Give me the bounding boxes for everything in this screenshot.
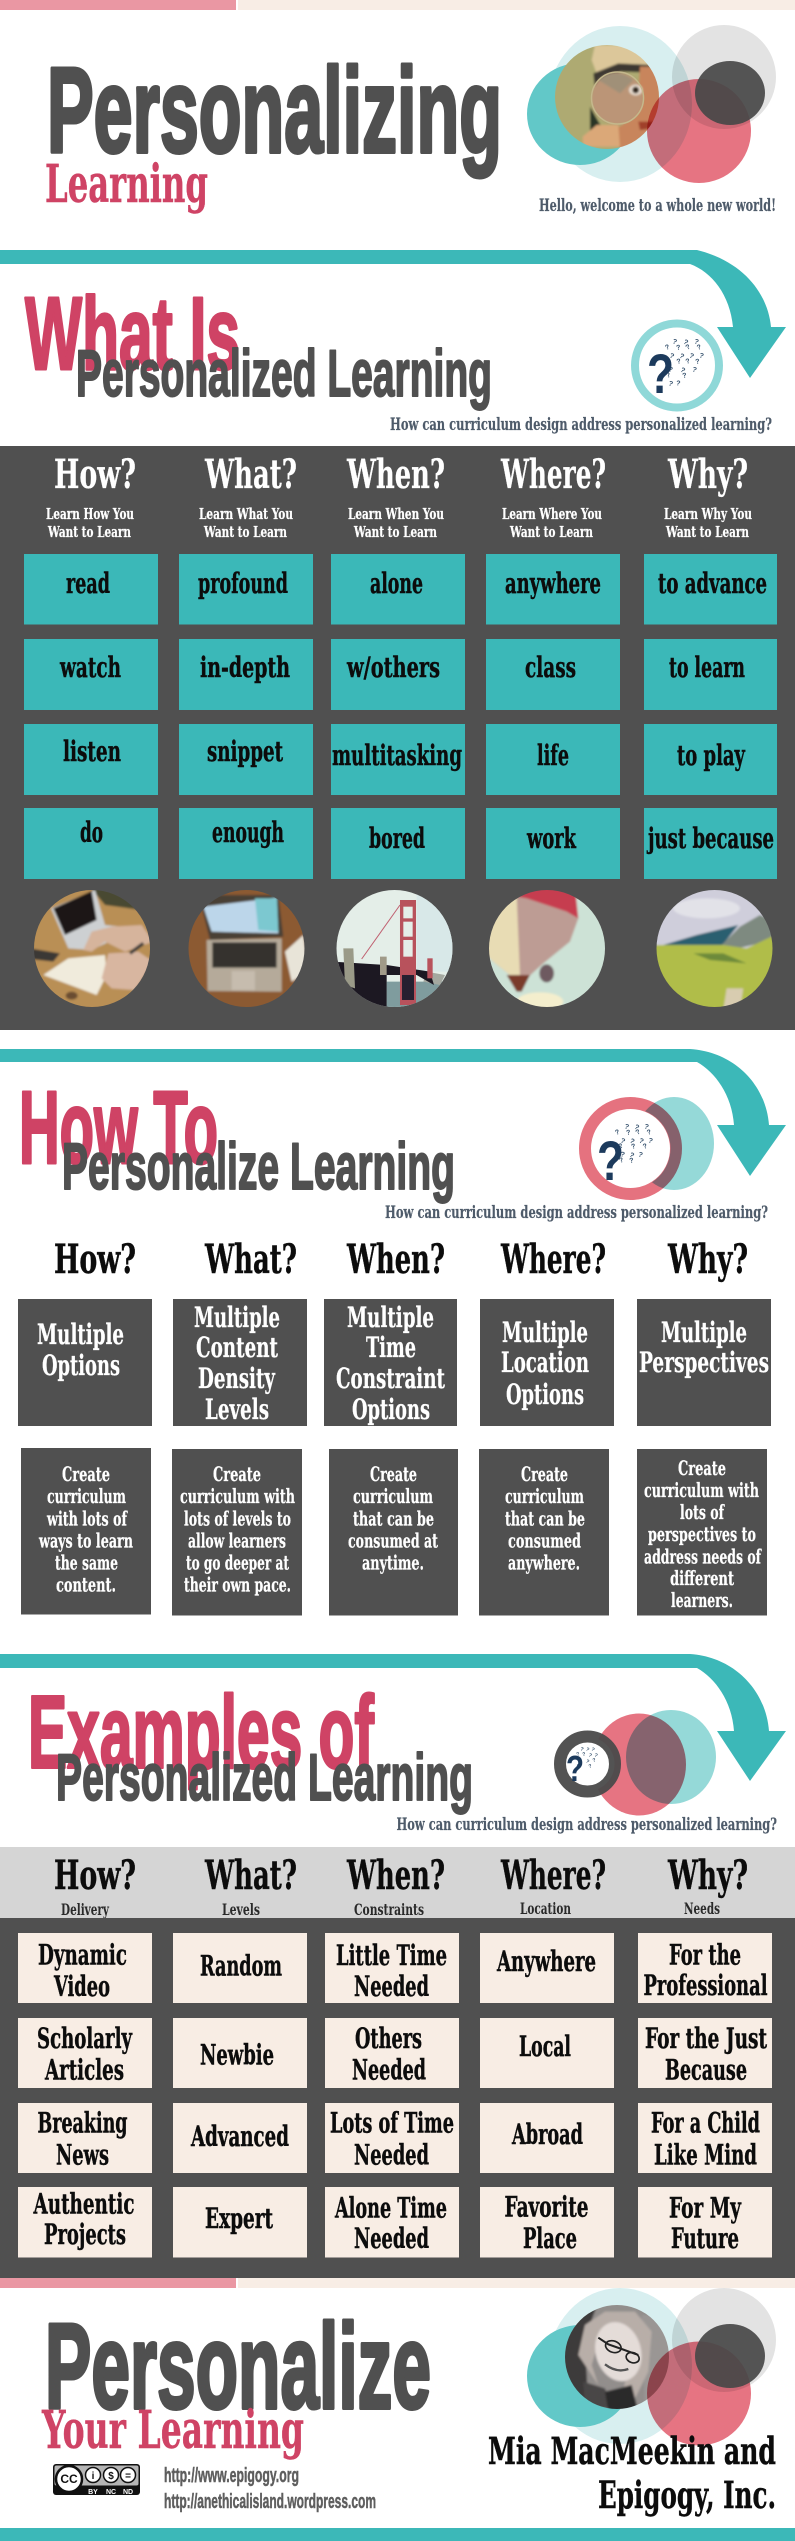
option labels: profound <box>198 567 288 600</box>
column subheadings: Learn What You <box>199 505 293 523</box>
column headings: how to: When? <box>346 1236 445 1283</box>
heading: Personalize Learning: Personalize Learning <box>62 1129 455 1203</box>
strategy labels: Options <box>352 1393 430 1426</box>
bottom teal bar <box>0 2528 795 2541</box>
licence badge: ND <box>123 2489 133 2496</box>
icon: question mark circle: ? ? ? ? <box>666 358 700 367</box>
column headings: Why? <box>667 451 748 498</box>
example labels: Needed <box>354 2222 429 2255</box>
licence badge: i <box>92 2471 95 2482</box>
footer title: Personalize <box>45 2298 431 2434</box>
example labels: Abroad <box>511 2118 583 2151</box>
teal option boxes <box>24 554 777 879</box>
description text: ways to learn <box>38 1528 133 1552</box>
description text: Create <box>678 1456 726 1480</box>
example labels: Needed <box>354 2138 429 2172</box>
description text: Create <box>213 1462 261 1486</box>
icon: question mark circle: ? ? ? ? <box>664 344 702 353</box>
example labels: Authentic <box>33 2188 134 2220</box>
option labels: multitasking <box>332 739 462 772</box>
cream boxes <box>18 1933 772 2258</box>
band headings <box>54 1852 748 1899</box>
description text: different <box>670 1566 734 1590</box>
column subheadings: Want to Learn <box>509 523 593 541</box>
example labels: Alone Time <box>334 2192 447 2224</box>
icon: question mark circle: ? ? ? <box>667 366 697 375</box>
links: http://anethicalisland.wordpress.com <box>164 2491 376 2513</box>
option labels: anywhere <box>505 567 601 600</box>
example labels: Advanced <box>190 2120 289 2153</box>
band labels <box>61 1899 720 1919</box>
option labels: in-depth <box>200 651 290 684</box>
example labels: Place <box>523 2222 577 2255</box>
icon: question mark with overlapping circles: ? ? ? ? <box>576 1751 598 1759</box>
option labels <box>59 567 774 855</box>
description text: curriculum <box>47 1484 126 1508</box>
description text: with lots of <box>46 1506 128 1530</box>
icon: question mark with overlapping circles: ? ? <box>576 1763 592 1770</box>
description text: curriculum with <box>180 1484 295 1508</box>
description text: Create <box>62 1462 110 1486</box>
arrow: section 3 <box>0 1654 786 1781</box>
description text: allow learners <box>188 1528 286 1552</box>
band labels: Needs <box>684 1899 720 1918</box>
strategy labels: Constraint <box>336 1362 445 1395</box>
option labels: life <box>537 739 569 772</box>
licence badge: BY <box>88 2489 98 2496</box>
strategy labels: Multiple <box>37 1318 124 1351</box>
example labels: Articles <box>44 2054 124 2086</box>
example labels: Needed <box>352 2054 426 2086</box>
photo: hot air balloon <box>489 890 605 1007</box>
heading: Examples of: Examples of <box>28 1674 374 1790</box>
author credit <box>488 2429 776 2517</box>
band headings: When? <box>346 1852 445 1899</box>
panel: examples header band <box>0 1847 795 1919</box>
column subheadings: Want to Learn <box>665 523 749 541</box>
photo: green mountain landscape <box>656 890 772 1007</box>
panel: what is personalized learning <box>0 446 795 1030</box>
dark strategy boxes <box>18 1299 771 1426</box>
column subheadings: Learn Where You <box>502 505 602 523</box>
example labels: Dynamic <box>38 1938 127 1972</box>
licence badge: = <box>125 2471 131 2482</box>
band labels: Delivery <box>61 1900 109 1919</box>
footer subtitle: Your Learning <box>41 2400 304 2461</box>
top colour bars <box>0 0 795 10</box>
icon: question mark with pink ring: ? ? ? ? <box>619 1137 653 1146</box>
example labels: Breaking <box>38 2106 128 2140</box>
icon: question mark with pink ring <box>585 1097 714 1194</box>
icon: question mark with overlapping circles <box>560 1710 716 1816</box>
description text: consumed <box>508 1528 581 1552</box>
column headings: What? <box>204 451 297 498</box>
band headings: Where? <box>500 1852 606 1899</box>
strategy labels <box>37 1301 769 1426</box>
example labels: Projects <box>44 2218 126 2251</box>
strategy labels: Time <box>366 1331 416 1364</box>
description text: that can be <box>353 1506 434 1530</box>
photo: hands writing at laptop <box>34 890 150 1007</box>
description text: content. <box>56 1572 116 1596</box>
column subheadings: Learn When You <box>348 505 444 523</box>
band labels: Levels <box>222 1900 260 1919</box>
description text: Create <box>370 1462 417 1486</box>
column subheadings: Want to Learn <box>353 523 437 541</box>
example labels: Future <box>671 2222 739 2255</box>
option labels: work <box>526 822 576 855</box>
icon: question mark with overlapping circles: ? ? ? <box>577 1757 596 1765</box>
description text: lots of <box>680 1500 725 1524</box>
subtitle: Learning: Learning <box>45 154 208 215</box>
option labels: w/others <box>346 651 440 684</box>
option labels: do <box>80 816 103 849</box>
strategy labels: Multiple <box>347 1301 434 1334</box>
icon: question mark with pink ring: ? ? ? ? <box>614 1129 652 1138</box>
option labels: listen <box>63 735 121 768</box>
column headings <box>54 451 748 498</box>
description text: curriculum <box>505 1484 584 1508</box>
description text: lots of levels to <box>184 1506 291 1530</box>
description text: Create <box>521 1462 568 1486</box>
icon: question mark with overlapping circles: ? ? ? <box>579 1746 596 1753</box>
description text: curriculum <box>353 1484 433 1508</box>
column headings: how to <box>54 1236 748 1283</box>
example labels: Favorite <box>504 2190 588 2224</box>
heading: Personalized Learning: Personalized Learning <box>56 1740 473 1814</box>
example labels: Random <box>200 1950 282 1982</box>
icon: question mark with overlapping circles: ? <box>566 1748 584 1789</box>
option labels: read <box>66 567 110 600</box>
icon: question mark with pink ring: ? ? <box>618 1157 634 1166</box>
strategy labels: Content <box>196 1331 278 1364</box>
description text: to go deeper at <box>186 1550 289 1574</box>
description text: that can be <box>505 1506 585 1530</box>
example labels: Little Time <box>336 1939 447 1972</box>
strategy labels: Location <box>501 1346 589 1379</box>
option labels: enough <box>212 816 284 849</box>
band headings: What? <box>204 1852 297 1899</box>
column subheadings: Want to Learn <box>203 523 287 541</box>
icon: question mark circle <box>635 324 719 408</box>
photo: golden gate bridge <box>336 890 452 1007</box>
example labels: For My <box>669 2192 741 2224</box>
footer circles with author photo <box>527 2288 776 2446</box>
column headings: how to: Why? <box>667 1236 748 1283</box>
example labels <box>33 1938 767 2255</box>
strategy labels: Levels <box>205 1393 269 1426</box>
example labels: Needed <box>354 1970 429 2003</box>
strategy labels: Multiple <box>194 1301 280 1334</box>
column headings: Where? <box>500 451 606 498</box>
example labels: Anywhere <box>496 1945 596 1978</box>
icon: question mark circle: ? ? <box>665 372 687 381</box>
icon: question mark with pink ring: ? ? ? <box>619 1151 643 1160</box>
footer colour bars <box>0 2278 795 2288</box>
option labels: class <box>525 651 576 684</box>
option labels: bored <box>369 822 425 855</box>
example labels: Because <box>665 2054 747 2086</box>
description text: anywhere. <box>508 1550 580 1574</box>
licence badge <box>53 2464 140 2496</box>
arrow: section 1 <box>0 250 786 378</box>
band headings: Why? <box>667 1852 748 1899</box>
option labels: to learn <box>669 651 745 684</box>
icon: question mark with pink ring: ? <box>597 1129 624 1192</box>
icon: question mark circle: ? <box>647 342 674 405</box>
strategy labels: Density <box>198 1362 275 1395</box>
description text: their own pace. <box>184 1572 291 1596</box>
icon: question mark with pink ring: ? ? ? <box>618 1143 648 1152</box>
example labels: Newbie <box>200 2038 274 2072</box>
column subheadings: Want to Learn <box>47 523 131 541</box>
column subheadings <box>46 505 752 541</box>
heading: How To: How To <box>19 1070 218 1185</box>
example labels: Expert <box>205 2202 273 2235</box>
photo: laptop from above <box>188 890 304 1007</box>
dark description boxes <box>21 1448 767 1616</box>
header circles with photo <box>527 25 776 183</box>
panel: examples grid <box>0 1918 795 2278</box>
links <box>164 2465 376 2513</box>
licence badge: NC <box>106 2489 116 2496</box>
column subheadings: Learn Why You <box>664 505 752 523</box>
description text: learners. <box>671 1588 733 1612</box>
heading: What Is: What Is <box>25 276 240 391</box>
description text: the same <box>55 1550 118 1574</box>
licence badge: $ <box>108 2471 114 2482</box>
example labels: News <box>56 2138 109 2172</box>
strategy labels: Multiple <box>661 1316 747 1349</box>
description text <box>38 1456 762 1612</box>
description text: anytime. <box>362 1550 424 1574</box>
column headings: how to: What? <box>204 1236 297 1283</box>
strategy labels: Multiple <box>502 1316 588 1349</box>
option labels: alone <box>370 567 423 600</box>
description text: consumed at <box>348 1528 438 1552</box>
example labels: Video <box>53 1970 110 2003</box>
icon: question mark circle: ? ? ? <box>671 338 699 347</box>
strategy labels: Options <box>506 1378 584 1411</box>
column headings: how to: Where? <box>500 1236 606 1283</box>
icon: question mark with pink ring: ? ? ? <box>623 1123 649 1132</box>
links: http://www.epigogy.org <box>164 2465 299 2487</box>
band labels: Constraints <box>354 1900 424 1919</box>
band labels: Location <box>520 1899 571 1918</box>
column subheadings: Learn How You <box>46 505 134 523</box>
option labels: to play <box>677 739 745 772</box>
option labels: watch <box>59 651 121 684</box>
arrow: section 2 <box>0 1049 786 1176</box>
licence badge: CC <box>60 2472 78 2486</box>
column headings: How? <box>54 451 136 498</box>
option labels: snippet <box>207 735 283 768</box>
photo: person with magnifying glass <box>555 45 659 149</box>
icon: question mark circle: ? ? <box>667 380 681 388</box>
example labels: Others <box>355 2022 422 2055</box>
strategy labels: Options <box>42 1349 120 1382</box>
example labels: Lots of Time <box>330 2106 454 2140</box>
lens rim <box>592 72 644 124</box>
column headings: When? <box>346 451 445 498</box>
icon: question mark circle: ? ? ? ? <box>668 352 704 361</box>
example labels: Scholarly <box>37 2022 132 2055</box>
example labels: For the <box>669 1938 741 1972</box>
band headings: How? <box>54 1852 136 1899</box>
heading: Personalized Learning: Personalized Learning <box>76 336 492 410</box>
example labels: Local <box>519 2030 571 2063</box>
photo: author portrait <box>565 2305 669 2409</box>
column headings: how to: How? <box>54 1236 136 1283</box>
